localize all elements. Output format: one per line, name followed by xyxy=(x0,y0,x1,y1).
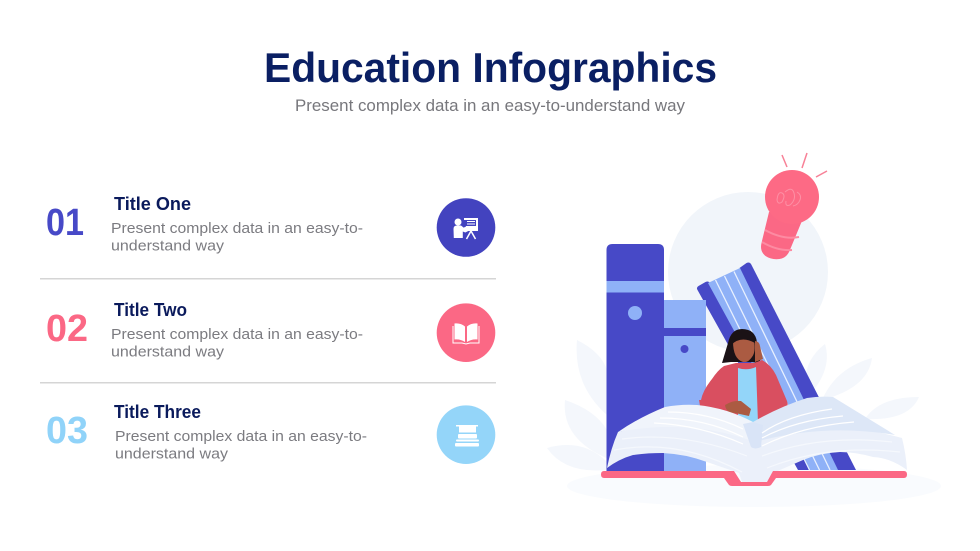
shirt xyxy=(738,367,758,423)
red cover xyxy=(601,471,907,486)
leaves xyxy=(547,340,919,471)
raised hand xyxy=(755,341,763,362)
divider xyxy=(40,382,496,383)
open book xyxy=(601,397,907,486)
panel: item three xyxy=(46,402,495,464)
icon: graduation books xyxy=(437,405,495,464)
center wedge xyxy=(743,422,763,448)
text block: item one: understand way xyxy=(111,238,225,254)
face xyxy=(733,338,755,362)
ground shadow xyxy=(567,465,941,507)
text block: item three: understand way xyxy=(115,446,229,462)
icon: open book xyxy=(437,303,495,362)
page lines xyxy=(614,437,900,472)
illustration: reader on open book xyxy=(547,153,941,507)
panel: item two xyxy=(46,300,495,362)
resting hand xyxy=(725,401,751,416)
heading: title two: Title Two xyxy=(114,300,187,320)
text block: item three: Present complex data in an easy-to- xyxy=(115,428,367,445)
subtitle: Present complex data in an easy-to-understand way xyxy=(295,97,686,115)
lower pages xyxy=(607,424,907,482)
text block: item two: understand way xyxy=(111,344,225,360)
heading: title one: Title One xyxy=(114,194,191,214)
jacket xyxy=(699,360,788,432)
number 03: 03 xyxy=(46,410,88,452)
text block: item one: Present complex data in an easy-to- xyxy=(111,220,363,237)
divider xyxy=(40,278,496,279)
text block: item two: Present complex data in an easy-to- xyxy=(111,326,363,343)
panel: item one xyxy=(46,194,495,257)
number 02: 02 xyxy=(46,308,88,350)
light bulb xyxy=(761,153,827,259)
hair xyxy=(722,329,761,363)
person xyxy=(699,329,788,432)
background circle xyxy=(668,192,828,352)
upper right pages xyxy=(753,397,895,442)
title: Education Infographics xyxy=(264,44,717,91)
heading: title three: Title Three xyxy=(114,402,201,422)
second book xyxy=(664,300,706,471)
tilted book xyxy=(697,262,856,470)
upper left pages xyxy=(618,405,755,442)
tall book xyxy=(606,244,664,471)
number 01: 01 xyxy=(46,202,84,244)
icon: teacher at board xyxy=(437,198,495,257)
